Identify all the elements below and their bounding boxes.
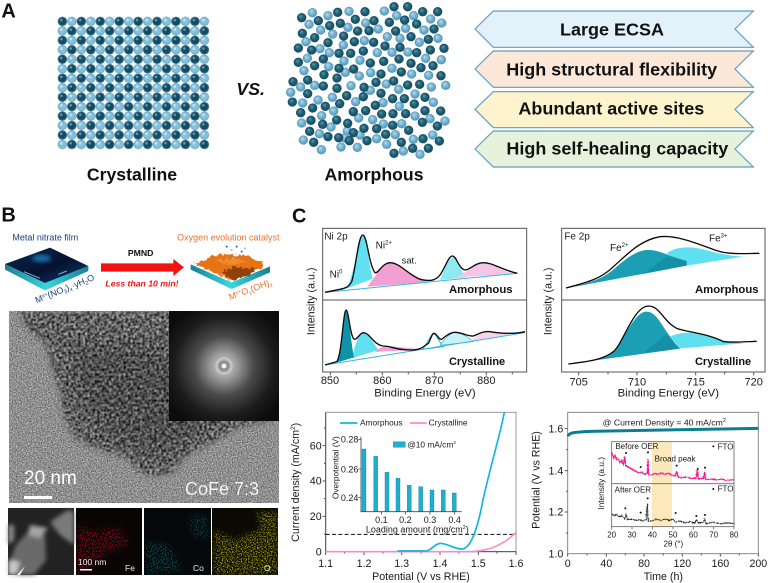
catalyst formula: z [269,282,274,289]
catalyst formula: (OH) [249,278,271,294]
scale bar 20 nm: 20 nm [24,468,77,489]
polarisation labels [290,423,523,583]
polarisation labels: 1.6 [509,558,523,570]
Fe map: Fe [125,563,135,573]
polarisation labels: 1.4 [433,558,447,570]
Ni labels: 2+ [385,240,392,246]
Ni frame and axis [323,228,527,375]
precursor formula: ) [64,282,71,293]
stability labels: Time (h) [644,571,683,583]
crystalline lattice [58,17,209,149]
scale bar 20 nm [24,468,77,499]
HAADF image [8,508,74,575]
stability labels: 0 [565,558,571,570]
O map: O [264,563,271,573]
panel A: crystalline vs amorphous [1,0,450,184]
inset bar chart: 2 [463,525,466,531]
stability labels: 1.0 [549,548,563,560]
elemental maps [8,508,278,575]
inset bar chart: 0.1 [375,515,388,525]
Ni labels: Ni 2p [324,232,348,243]
XRD inset: 60 [689,530,698,539]
precursor formula: M [34,293,44,305]
XRD inset: FTO [718,485,733,494]
crystalline curve [326,532,516,552]
polarisation labels: 1.1 [318,558,333,570]
XRD inset: After OER [615,486,651,495]
Fe labels: Fe [709,233,721,244]
stability labels: Potential (V vs RHE) [530,431,542,529]
Ni crystalline envelope [325,310,525,365]
XRD inset: FTO [718,443,733,452]
Ni amorphous envelope [325,235,517,292]
FFT inset [169,311,279,421]
Ni labels: Intensity (a.u.) [306,268,318,335]
Fe labels: Crystalline [695,356,751,368]
Ni labels: sat. [402,256,417,266]
stability labels [530,423,767,583]
XRD inset: 2θ (°) [664,540,683,549]
polarisation labels: 1.5 [471,558,486,570]
Ni labels: Ni [330,270,339,281]
Fe crystalline fits [568,312,743,364]
Fe amorphous fits [566,247,743,288]
panel label B: B [1,205,16,227]
polarisation labels: 2 [290,426,297,430]
Ni labels: 0 [339,270,343,276]
banner: self-healing: High self-healing capacity [506,138,728,158]
nitrate film slab [5,248,88,290]
potential trace [568,428,758,436]
legend: Crystalline [429,418,468,428]
Fe labels: Fe 2p [564,232,590,243]
XRD inset: Before OER [615,442,659,451]
inset bar chart: 0.28 [341,435,358,445]
inset bar chart: 0.26 [341,464,358,474]
Fe labels: Intensity (a.u.) [543,268,555,335]
banner: self-healing [475,131,753,167]
Ni labels: Binding Energy (eV) [374,388,476,400]
catalyst formula: y [248,290,253,297]
chart: Fe 2p XPS [543,228,765,400]
XRD inset: 80 [730,530,739,539]
polarisation labels: 20 [310,511,322,523]
Ni amorphous fits [325,235,517,292]
stability labels: 40 [600,558,612,570]
catalyst formula: M [227,290,238,302]
Ni labels: 870 [425,375,443,387]
Fe frame and axis [562,228,765,375]
Ni labels [306,232,513,400]
property banners [475,11,753,167]
panel C: characterisation charts [290,206,767,583]
Fe amorphous envelope [566,236,759,288]
synthesis schematic [1,205,280,307]
Co map: Co [193,563,204,573]
Ni labels: Crystalline [449,356,505,368]
inset bar chart: 0.24 [341,493,358,503]
stability labels: 1.6 [549,423,563,435]
polarisation frame [323,412,516,555]
chart: stability test [530,412,767,583]
crystalline caption: Crystalline [87,164,177,184]
inset bar chart: ) [466,524,469,534]
vs label: VS. [236,79,265,99]
Ni labels: Amorphous [449,284,513,296]
PMND label: PMND [128,248,153,258]
panel B: synthesis and microscopy [1,205,280,575]
Ni labels: 860 [373,375,391,387]
inset bar chart: @10 mA/cm [407,439,453,449]
polarisation labels: Current density (mA/cm [290,430,302,542]
XRD inset: Broad peak [655,454,696,463]
legend [340,418,468,428]
Fe labels: 720 [745,376,763,388]
stability labels: 120 [673,558,691,570]
amorphous caption: Amorphous [324,164,424,184]
XRD inset: 70 [709,530,719,539]
catalyst slab [191,246,270,289]
polarisation labels: 1.2 [357,558,371,570]
legend: Amorphous [360,418,403,428]
Fe labels: Amorphous [695,284,759,296]
Co map [144,508,211,575]
XRD inset: 40 [648,530,657,539]
precursor formula: 3 [63,289,69,296]
XRD inset: 50 [669,530,678,539]
Ni labels: 880 [477,375,495,387]
inset bar chart: 0.4 [448,515,461,525]
O map [212,508,278,575]
precursor formula: 2 [85,280,90,287]
stability labels: 80 [638,558,650,570]
XRD inset: 20 [607,530,617,539]
panel label C: C [292,206,306,228]
XRD inset [596,442,739,549]
banner: large ECSA: Large ECSA [560,20,664,40]
inset bar chart [330,435,469,534]
stability labels: 1.4 [549,465,563,477]
Fe labels: 705 [570,376,588,388]
Ni labels: Ni [376,240,385,251]
current density note: @ Current Density = 40 mA/cm [603,417,723,427]
metal nitrate film label: Metal nitrate film [12,233,78,243]
sample label: CoFe 7:3 [185,479,259,499]
precursor formula: O [85,272,96,284]
precursor formula: x [69,287,74,293]
XRD inset: 30 [628,530,637,539]
panel label A: A [1,0,16,22]
polarisation labels: 1.3 [394,558,409,570]
stability labels: 160 [711,558,729,570]
Fe map [76,508,142,575]
Fe map: 100 nm [78,557,106,567]
Fe labels: 2+ [622,243,629,249]
XRD inset: Intensity (a.u.) [596,457,606,510]
Fe labels: Binding Energy (eV) [618,388,719,400]
catalyst formula: O [240,286,250,297]
Fe labels: 715 [687,376,705,388]
banner: active sites: Abundant active sites [518,99,704,119]
inset bar chart: Loading amount (mg/cm [366,524,463,534]
10 mA reference line [326,533,516,536]
inset bar chart: 2 [453,440,456,446]
time label: Less than 10 min! [105,278,179,288]
catalyst label: Oxygen evolution catalyst [177,233,280,243]
amorphous particle cloud [286,2,450,159]
Fe labels: 710 [628,376,646,388]
polarisation labels: 40 [310,476,322,488]
precursor formula: x+ [41,292,49,300]
inset bar chart: 0.2 [399,515,412,525]
catalyst formula: x+ [235,289,242,296]
polarisation labels: 60 [310,440,322,452]
precursor formula: ·yH [70,276,86,291]
current density note: 2 [723,418,726,424]
chart: polarisation curve [290,412,523,583]
amorphous curve [397,412,504,551]
precursor formula: (NO [46,285,65,300]
inset bar chart: 0.3 [424,515,436,525]
stability labels: 1.2 [549,507,563,519]
banner: active sites [475,92,753,128]
polarisation labels: Potential (V vs RHE) [372,571,470,583]
Fe labels: 3+ [721,233,728,239]
polarisation labels: ) [290,423,302,426]
banner: structural flexibility [475,51,753,87]
Ni crystalline fits [325,310,525,365]
Fe labels [543,232,763,400]
process arrow [101,259,184,276]
banner: large ECSA [475,11,753,47]
Ni labels: 850 [321,375,339,387]
inset bar chart: Overpotential (V) [330,436,340,499]
stability labels: 200 [749,558,767,570]
banner: structural flexibility: High structural flexibility [506,59,717,79]
TEM image [9,311,279,503]
chart: Ni 2p XPS [292,206,527,400]
polarisation labels: 0 [316,546,322,558]
stability frame [565,412,758,557]
Fe crystalline envelope [568,306,757,364]
Fe labels: Fe [610,243,622,254]
